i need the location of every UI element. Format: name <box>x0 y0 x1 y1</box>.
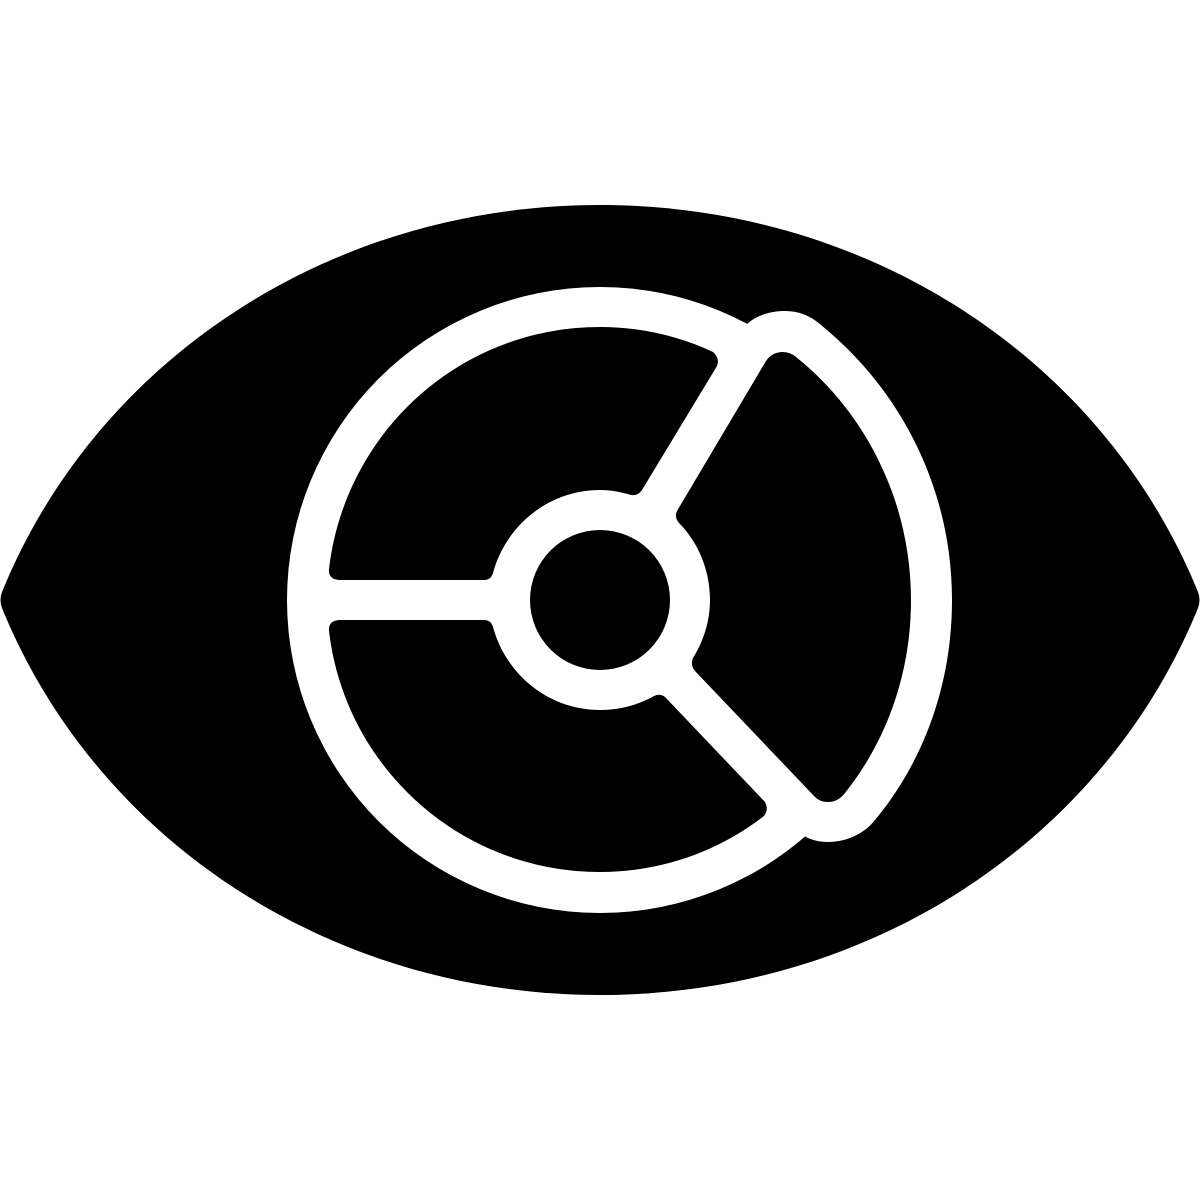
iris ring with bulge <box>287 287 952 913</box>
pupil <box>530 530 670 670</box>
iris segment: upper left <box>329 327 718 580</box>
iris segment: lower left <box>329 620 767 872</box>
eye outline <box>0 205 1200 995</box>
iris segment: right <box>676 352 911 802</box>
